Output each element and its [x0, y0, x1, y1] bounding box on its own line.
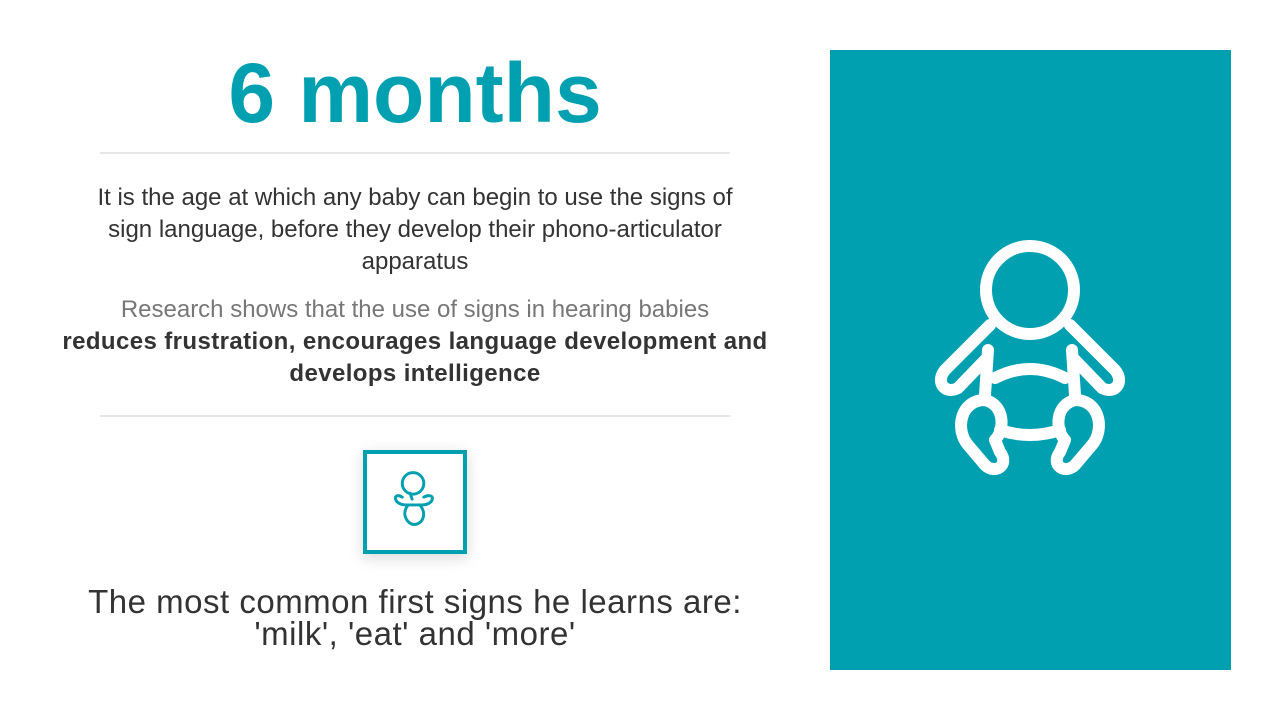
text: age description: apparatus [362, 248, 468, 275]
text: research: reduces frustration, encourages language development and [62, 328, 768, 355]
text: first signs [88, 583, 742, 652]
text: research [62, 296, 768, 387]
title: 6 months [228, 46, 602, 140]
text: first signs: 'milk', 'eat' and 'more' [254, 615, 576, 652]
text: age description: sign language, before they develop their phono-articulator [108, 216, 722, 243]
icon: pacifier box [363, 450, 467, 554]
text: first signs: The most common first signs he learns are: [88, 583, 742, 620]
text: research: Research shows that the use of signs in hearing babies [121, 296, 709, 323]
text: research: develops intelligence [289, 360, 541, 387]
icon: baby [934, 240, 1126, 476]
text: age description: It is the age at which any baby can begin to use the signs of [97, 184, 733, 211]
text: age description [97, 184, 733, 275]
panel: baby [830, 50, 1231, 670]
